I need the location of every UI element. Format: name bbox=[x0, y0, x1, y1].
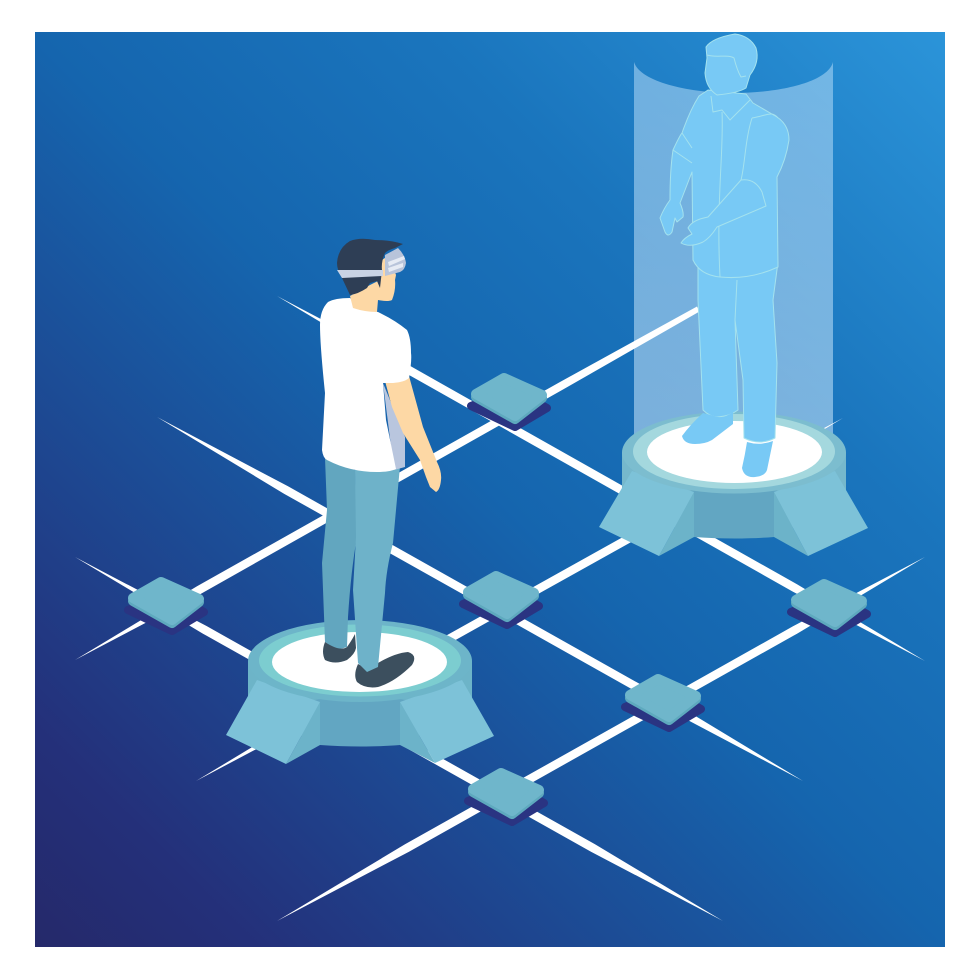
pedestal: hologram bbox=[599, 412, 868, 556]
hologram forearm and hand bbox=[681, 180, 766, 245]
node: right bbox=[791, 584, 867, 633]
node: lower right bbox=[625, 679, 701, 728]
hologram shirt and arms bbox=[660, 90, 789, 278]
hologram legs bbox=[698, 262, 778, 442]
trousers: front leg bbox=[353, 466, 400, 672]
trousers: back leg bbox=[322, 458, 357, 650]
arm bbox=[385, 376, 441, 492]
head and neck bbox=[350, 255, 396, 312]
VR headset bbox=[337, 248, 406, 278]
shoe: back bbox=[323, 634, 356, 662]
hologram foot: left bbox=[682, 412, 733, 444]
hologram foot: right bbox=[742, 441, 773, 477]
hologram head bbox=[705, 34, 757, 95]
t-shirt bbox=[320, 298, 411, 472]
hologram cylinder bbox=[634, 62, 833, 452]
hair bbox=[337, 239, 403, 295]
node: left bbox=[128, 582, 204, 631]
shirt shadow bbox=[383, 383, 405, 470]
node: centre bbox=[463, 576, 539, 625]
hologram person bbox=[660, 34, 789, 477]
shoe: front bbox=[355, 652, 414, 687]
hologram garment detail lines bbox=[673, 55, 778, 320]
pedestal: VR user bbox=[226, 620, 494, 764]
node: bottom bbox=[468, 773, 544, 822]
network grid lines bbox=[75, 296, 925, 921]
VR user person bbox=[320, 239, 441, 687]
node: top centre bbox=[471, 378, 547, 427]
